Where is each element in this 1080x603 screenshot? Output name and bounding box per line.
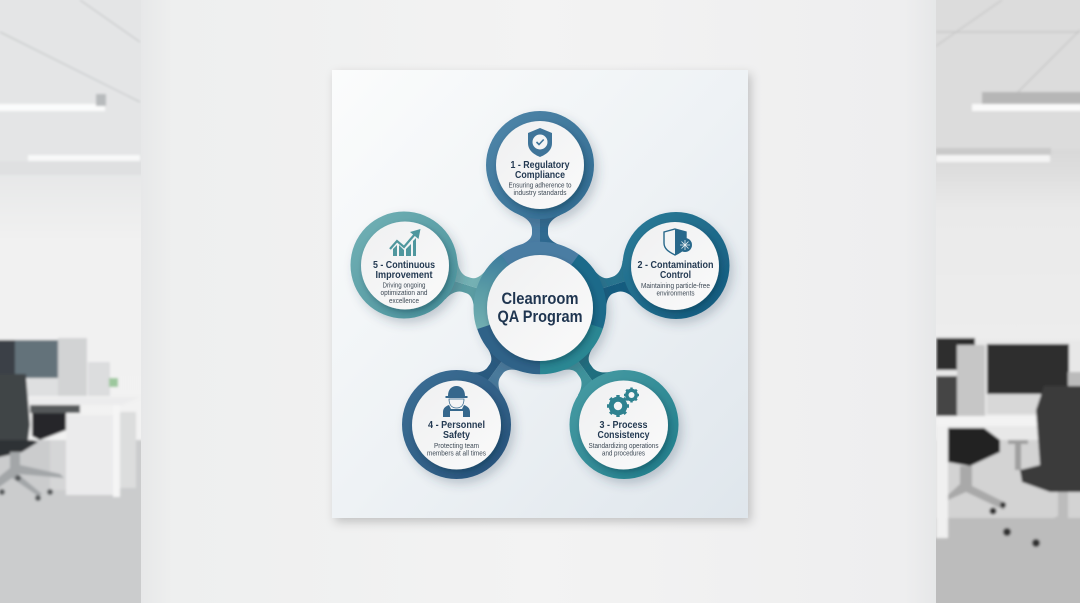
text: node 4	[427, 420, 486, 458]
node 3: Process Consistency	[570, 370, 678, 479]
office background: left	[0, 0, 145, 603]
office background: right	[930, 0, 1080, 603]
text: node 1: 1 - Regulatory	[510, 160, 570, 171]
text: node 4: members at all times	[427, 450, 486, 458]
text: node 3: 3 - Process	[600, 420, 648, 431]
center hub: Cleanroom QA Program	[474, 242, 607, 377]
text: node 4: 4 - Personnel	[428, 420, 485, 431]
text: node 4: Safety	[443, 430, 470, 441]
icon: worker with hard hat	[443, 386, 470, 417]
text: node 2	[638, 260, 714, 298]
text: node 3	[588, 420, 659, 458]
text: node 3: Standardizing operations	[588, 443, 659, 450]
node 1: Regulatory Compliance	[486, 111, 594, 219]
text: node 1: industry standards	[514, 190, 567, 197]
text: node 2: Maintaining particle-free	[641, 283, 710, 290]
text: node 3: Consistency	[598, 430, 650, 441]
text: node 1	[508, 160, 572, 197]
text: node 5: optimization and	[380, 290, 428, 297]
text: node 2: Control	[660, 270, 691, 281]
text: node 3: and procedures	[602, 450, 645, 458]
text: node 5: Improvement	[376, 270, 433, 281]
node 5: Continuous Improvement	[350, 212, 458, 318]
text: node 5: 5 - Continuous	[373, 260, 435, 271]
icon: shield with check	[528, 128, 552, 157]
node 4: Personnel Safety	[402, 370, 511, 479]
wall	[141, 0, 936, 603]
text: node 2: 2 - Contamination	[638, 260, 714, 271]
text: node 1: Compliance	[515, 170, 565, 181]
icon: shield with particle	[664, 229, 692, 255]
icon: rising chart with arrow	[390, 229, 420, 256]
center hub: Cleanroom QA Program: QA Program	[498, 307, 582, 326]
text: node 5: Driving ongoing	[382, 282, 426, 290]
spoke connectors	[442, 212, 638, 399]
node 2: Contamination Control	[622, 212, 730, 319]
text: node 2: environments	[656, 290, 695, 298]
text: node 1: Ensuring adherence to	[508, 182, 572, 190]
text: node 4: Protecting team	[434, 443, 479, 450]
icon: gears	[607, 388, 639, 417]
center hub: Cleanroom QA Program: Cleanroom	[502, 289, 578, 308]
text: node 5	[373, 260, 435, 305]
text: node 5: excellence	[389, 298, 419, 305]
panel: infographic board	[332, 70, 748, 518]
